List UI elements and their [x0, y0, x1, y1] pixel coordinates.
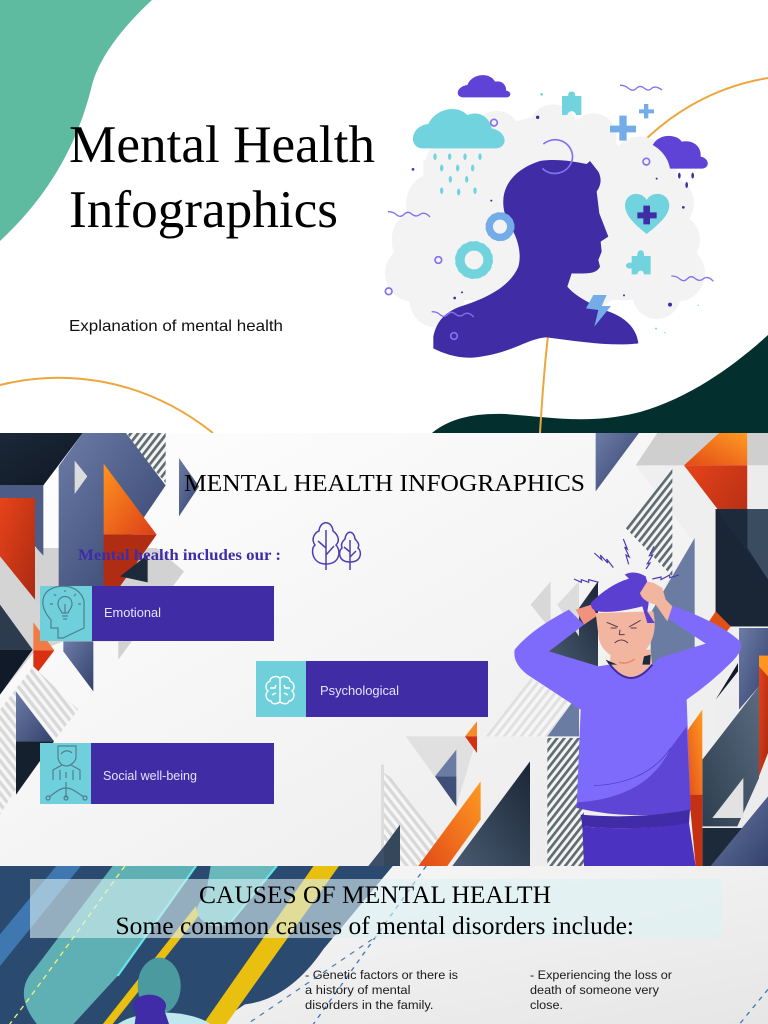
label: Emotional [104, 606, 161, 620]
label: Social well-being [103, 769, 197, 783]
text block: loss: - Experiencing the loss or [530, 968, 672, 982]
geometric shapes left [0, 433, 384, 866]
right hand [640, 581, 672, 621]
hair [591, 573, 655, 623]
arc thought [542, 140, 573, 173]
subtitle: Explanation of mental health [69, 318, 283, 335]
card: emotional [40, 586, 274, 641]
text block: genetic factors: disorders in the family. [305, 998, 434, 1012]
purple cloud right [653, 136, 708, 169]
waistband [581, 810, 690, 828]
text block: genetic factors: - Genetic factors or there is [305, 968, 458, 982]
gear teal [456, 242, 492, 278]
thought cloud background [385, 104, 705, 327]
geometric shapes right [384, 433, 768, 866]
small dots [412, 116, 685, 307]
face [596, 611, 655, 660]
heart plus [637, 206, 657, 224]
ears and hair back [606, 655, 651, 665]
mouth shade [619, 659, 635, 663]
neck [610, 650, 652, 679]
hands [576, 605, 597, 625]
illustration: stressed person [514, 539, 741, 866]
heading: MENTAL HEALTH INFOGRAPHICS [184, 470, 585, 497]
puzzle piece top [562, 91, 581, 115]
title second line: Infographics [69, 180, 338, 239]
text block: loss: close. [530, 998, 563, 1012]
orange line bottom left [0, 378, 213, 433]
collar [610, 665, 652, 678]
panel: slide 1 mental health title [0, 0, 768, 433]
icon: brain [256, 661, 306, 717]
dark drops [678, 173, 694, 188]
waves [388, 85, 713, 317]
card: psychological [256, 661, 488, 717]
face features [607, 620, 641, 643]
text block: genetic factors: a history of mental [305, 983, 410, 997]
gear blue [487, 213, 513, 240]
illustration: head with thought cloud [385, 75, 713, 358]
puzzle piece right [626, 250, 651, 274]
sweater [514, 606, 741, 810]
subheading: Mental health includes our : [78, 547, 281, 564]
panel: slide 3 causes [0, 866, 768, 1024]
card: social well-being [40, 743, 274, 804]
lightning [586, 295, 611, 327]
purple cloud top [458, 75, 510, 97]
icon: person network [40, 743, 91, 804]
green corner blob [0, 0, 152, 241]
icon: tree pair [313, 523, 360, 570]
head silhouette [433, 160, 638, 358]
raindrops [433, 153, 482, 195]
icon: head with lightbulb [40, 586, 92, 641]
orange line vertical [540, 336, 548, 433]
teal rain cloud [413, 109, 505, 148]
heading: CAUSES OF MENTAL HEALTH [199, 880, 551, 909]
panel: slide 2 mental health includes [0, 433, 768, 866]
light dots [540, 93, 699, 333]
plus small [639, 104, 654, 118]
orange line top right [642, 78, 768, 143]
sweater shade [577, 726, 691, 815]
title: Mental Health [69, 115, 375, 174]
dark wave bottom right [432, 335, 768, 433]
small rings [385, 119, 650, 339]
heart [625, 194, 669, 234]
subheading: Some common causes of mental disorders include: [116, 911, 634, 940]
pants [582, 823, 696, 866]
plus large [610, 116, 636, 141]
text block: loss: death of someone very [530, 983, 660, 997]
translucent heading band [30, 879, 722, 938]
graphic: diagonal bands [0, 866, 768, 1024]
label: Psychological [320, 684, 399, 698]
stress squiggles [574, 539, 679, 582]
sweater fold [594, 748, 671, 786]
